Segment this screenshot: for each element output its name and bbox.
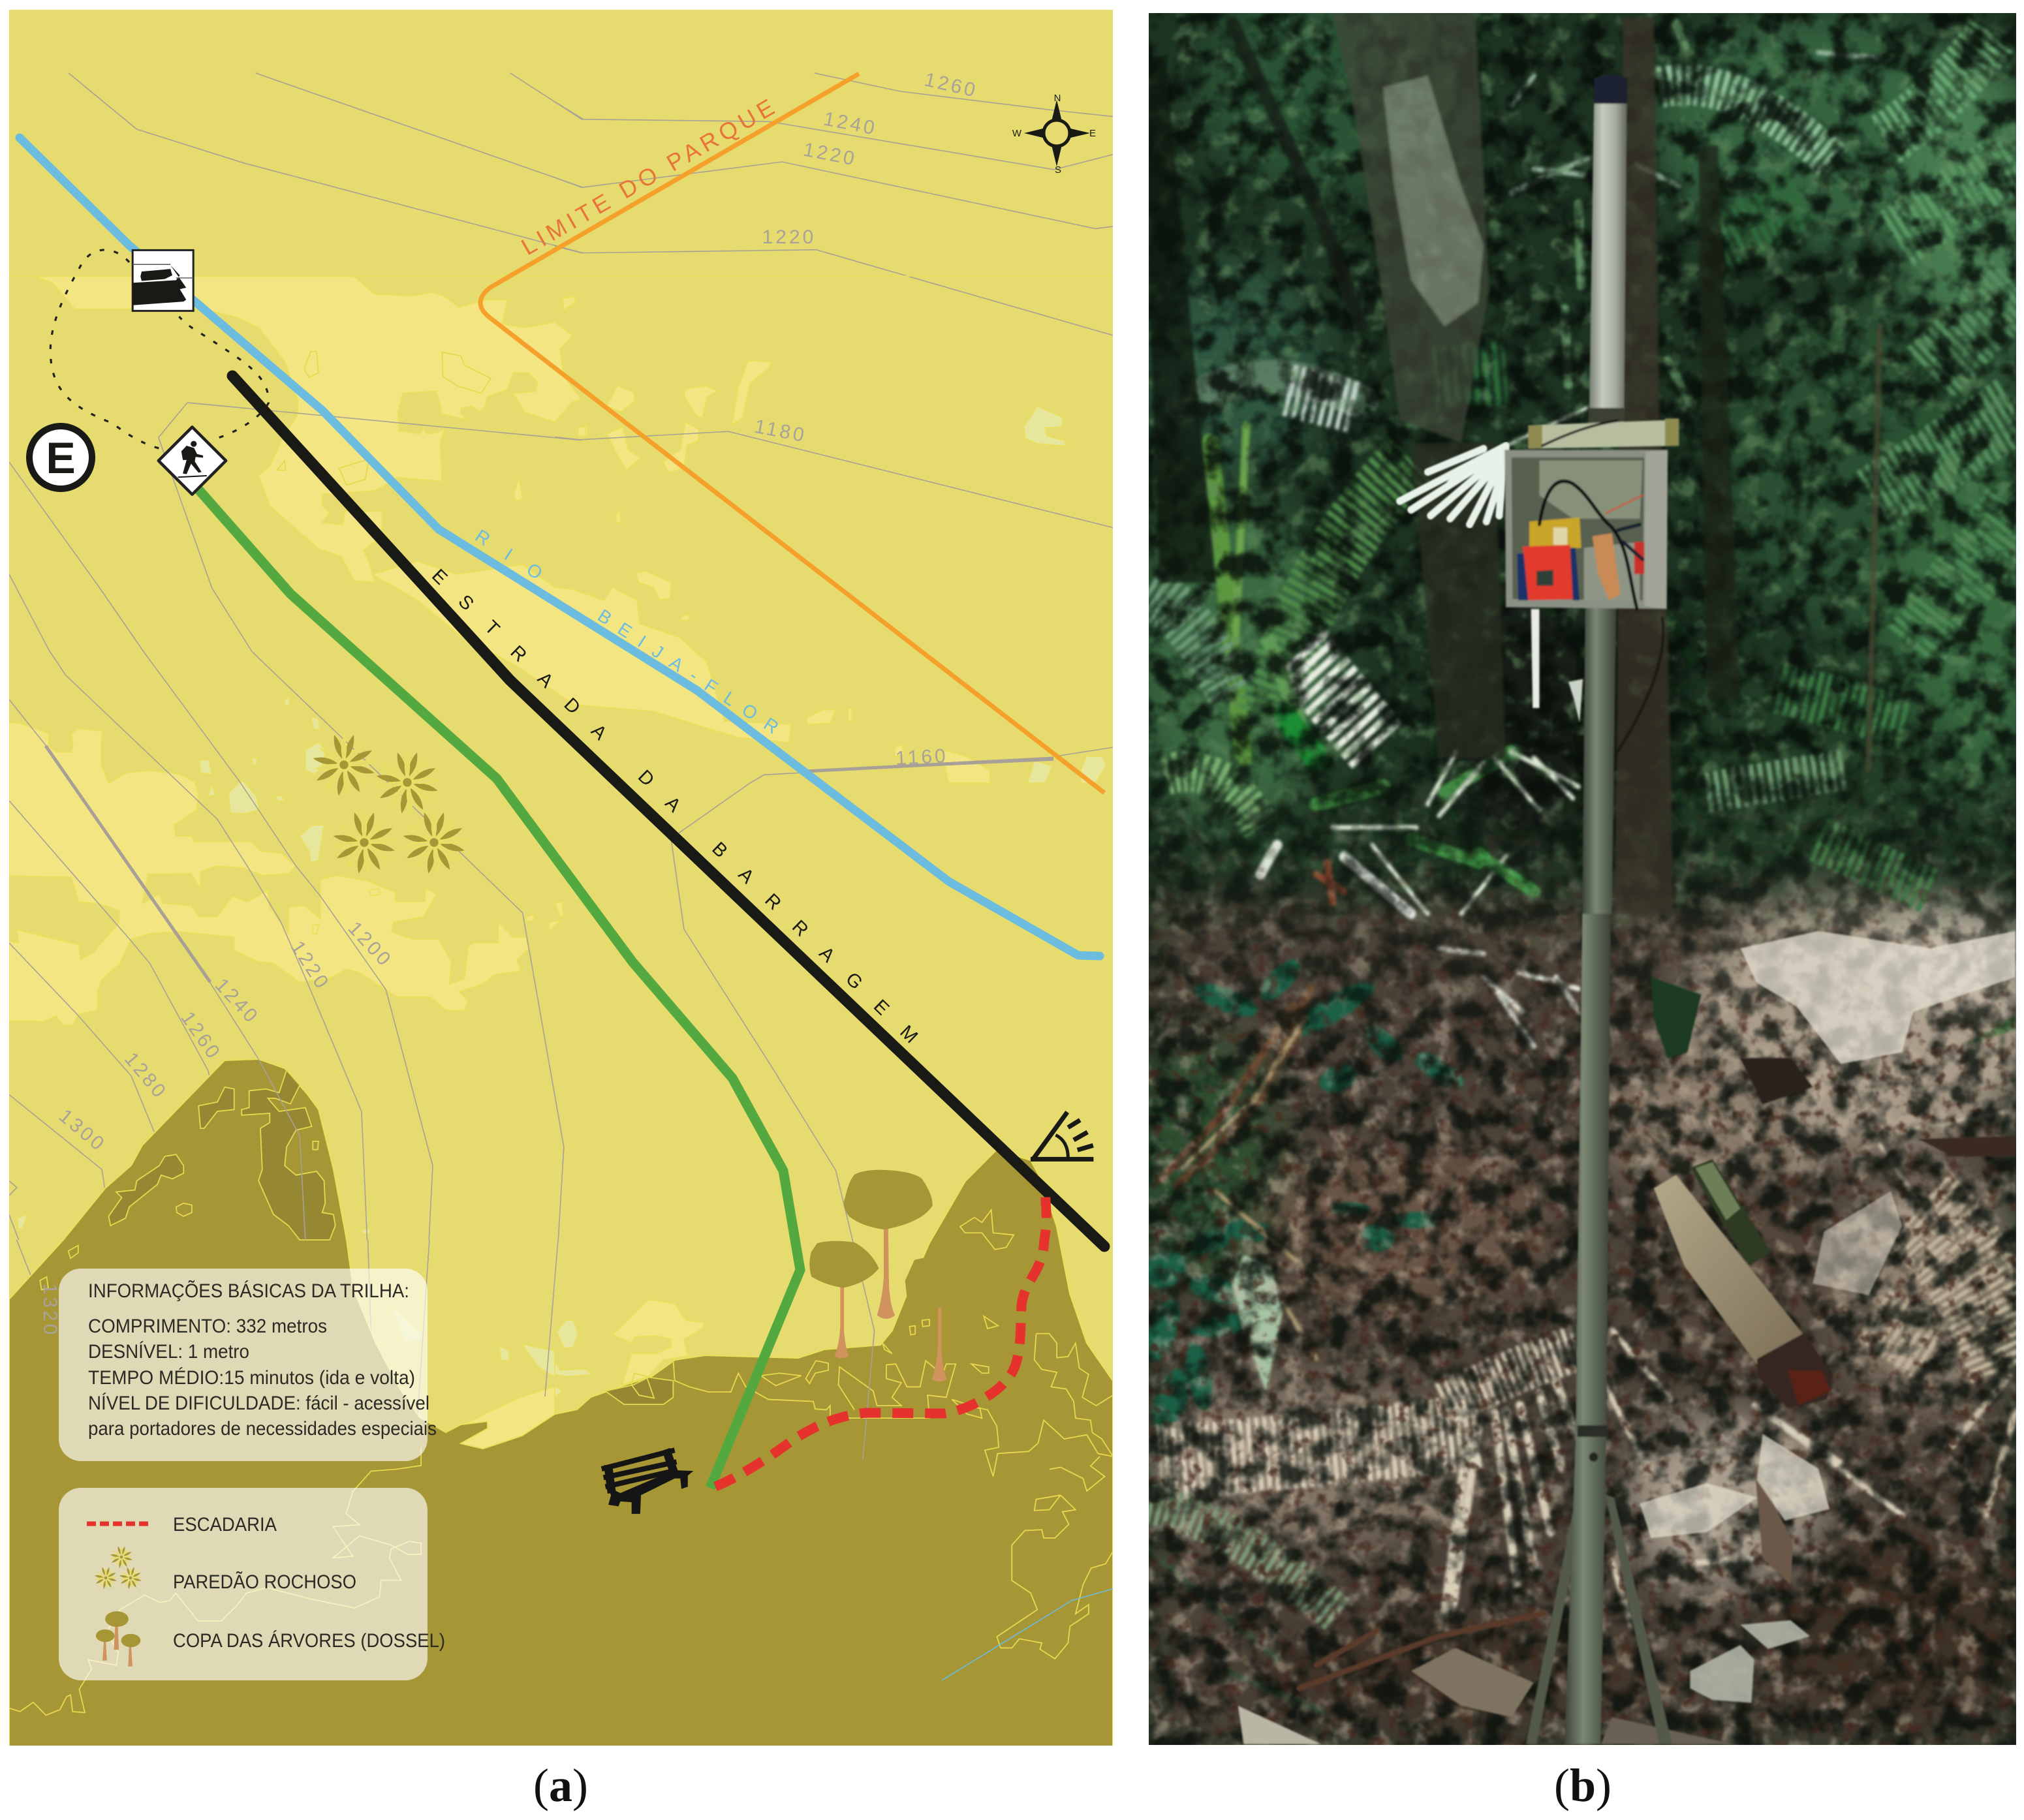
trail: red staircase — [715, 1189, 1046, 1487]
legend: canopy: COPA DAS ÁRVORES (DOSSEL) — [173, 1630, 445, 1652]
contour elevation labels: 1260 — [922, 69, 980, 102]
label: road name: ESTRADA DA BARRAGEM — [432, 568, 918, 1043]
terrain: light blobs east of the river — [563, 296, 1106, 783]
terrain: light ribbon along the road — [372, 561, 791, 743]
photo: pole with tripod — [1526, 74, 1672, 1744]
photo: dead palm fronds on the ground — [1149, 1113, 2016, 1712]
trail: black road — [232, 376, 1104, 1246]
icon: bench — [602, 1449, 693, 1514]
terrain: rock outlines on the west peak — [108, 1059, 335, 1240]
contour elevation labels: 1300 — [55, 1105, 110, 1156]
terrain: dark mountain and forest floor — [9, 1059, 1113, 1749]
icon: E marker: E — [46, 433, 76, 483]
contour elevation labels: 1180 — [753, 416, 808, 447]
icon: canopy trees — [809, 1170, 948, 1381]
icon: compass rose: S — [1055, 164, 1061, 176]
terrain: forest outlines and gray contours over the valley — [605, 1210, 1113, 1680]
terrain: light patches north of the road — [35, 277, 587, 583]
panel: photo (b) of sensor on pole in forest — [1136, 0, 2024, 1749]
contour elevation labels: 1280 — [120, 1049, 172, 1103]
panel: basic trail information: NÍVEL DE DIFICULDADE: fácil - acessível — [88, 1393, 429, 1414]
contour elevation labels: 1220 — [287, 937, 334, 995]
panel: basic trail information: COMPRIMENTO: 332 metros — [88, 1316, 327, 1337]
photo: foliage mottling — [1149, 13, 2016, 1122]
caption (a): (a) — [533, 1759, 588, 1812]
contour elevation labels: 1260 — [177, 1008, 225, 1064]
panel: map legend — [59, 1488, 445, 1680]
trail: orange park limit — [480, 74, 1104, 793]
terrain: large light band on the western slope — [9, 698, 564, 1234]
icon: trail start sign — [132, 250, 193, 311]
photo: palms left of the box — [1149, 377, 1587, 914]
icon: viewpoint — [1031, 1112, 1093, 1160]
panel: basic trail information: INFORMAÇÕES BÁSICAS DA TRILHA: — [88, 1280, 409, 1302]
panel: basic trail information: para portadores de necessidades especiais — [88, 1418, 437, 1440]
photo: shrub leaves lower left — [1138, 948, 2016, 1435]
label: river name: RIO BEIJA-FLOR — [475, 529, 778, 734]
contour elevation labels: 1240 — [822, 108, 879, 140]
legend: rock wall: PAREDÃO ROCHOSO — [173, 1571, 356, 1593]
legend: staircase: ESCADARIA — [173, 1514, 277, 1535]
legend: rock wall — [95, 1546, 356, 1593]
icon: rock wall flowers — [313, 734, 465, 874]
photo: vegetation and ground fronds — [1138, 23, 2016, 1712]
legend: canopy — [96, 1611, 445, 1667]
caption (b): (b) — [1554, 1759, 1611, 1812]
icon: compass rose: E — [1089, 128, 1096, 139]
contour elevation labels: 1220 — [802, 139, 859, 170]
photo: large tree trunks over the foliage — [1149, 13, 1880, 914]
photo: fern fronds upper right — [1659, 35, 2016, 891]
panel: basic trail information — [59, 1269, 437, 1461]
path for labels (invisible) — [431, 577, 949, 1082]
label: park limit: LIMITE DO PARQUE — [517, 93, 779, 260]
panel: basic trail information: DESNÍVEL: 1 metro — [88, 1341, 249, 1363]
photo: leaf litter mottling — [1149, 653, 2016, 1749]
photo: open sensor enclosure — [1504, 418, 1679, 752]
contour lines — [8, 73, 1113, 1680]
terrain: light area by the coast — [555, 1299, 704, 1397]
icon: hiker diamond sign — [159, 427, 226, 495]
icon: compass rose: N — [1054, 93, 1061, 104]
contour elevation labels — [39, 69, 980, 1337]
contour elevation labels: 1220 — [762, 226, 816, 248]
panel: trail map (a) — [9, 10, 1113, 1746]
trail: blue river — [20, 138, 1100, 956]
photo: sunlit palm frond beside the box — [1400, 446, 1506, 525]
photo: broad light and colour zones — [1136, 0, 2024, 1749]
icon: compass rose: W — [1012, 128, 1022, 139]
icon: E marker — [29, 426, 92, 489]
photo: fallen logs and ground patches — [1238, 931, 2016, 1744]
dotted loop — [50, 250, 269, 448]
icon: compass rose — [1012, 93, 1096, 176]
panel: basic trail information: TEMPO MÉDIO:15 minutos (ida e volta) — [88, 1367, 415, 1389]
contour elevation labels: 1200 — [344, 918, 396, 972]
photo: central epiphytes and leaves — [1433, 23, 1880, 402]
contour elevation labels: 1160 — [895, 745, 949, 769]
contour elevation labels: 1320 — [39, 1284, 61, 1337]
trail: green walking path — [194, 484, 800, 1488]
contour elevation labels: 1240 — [211, 974, 263, 1028]
